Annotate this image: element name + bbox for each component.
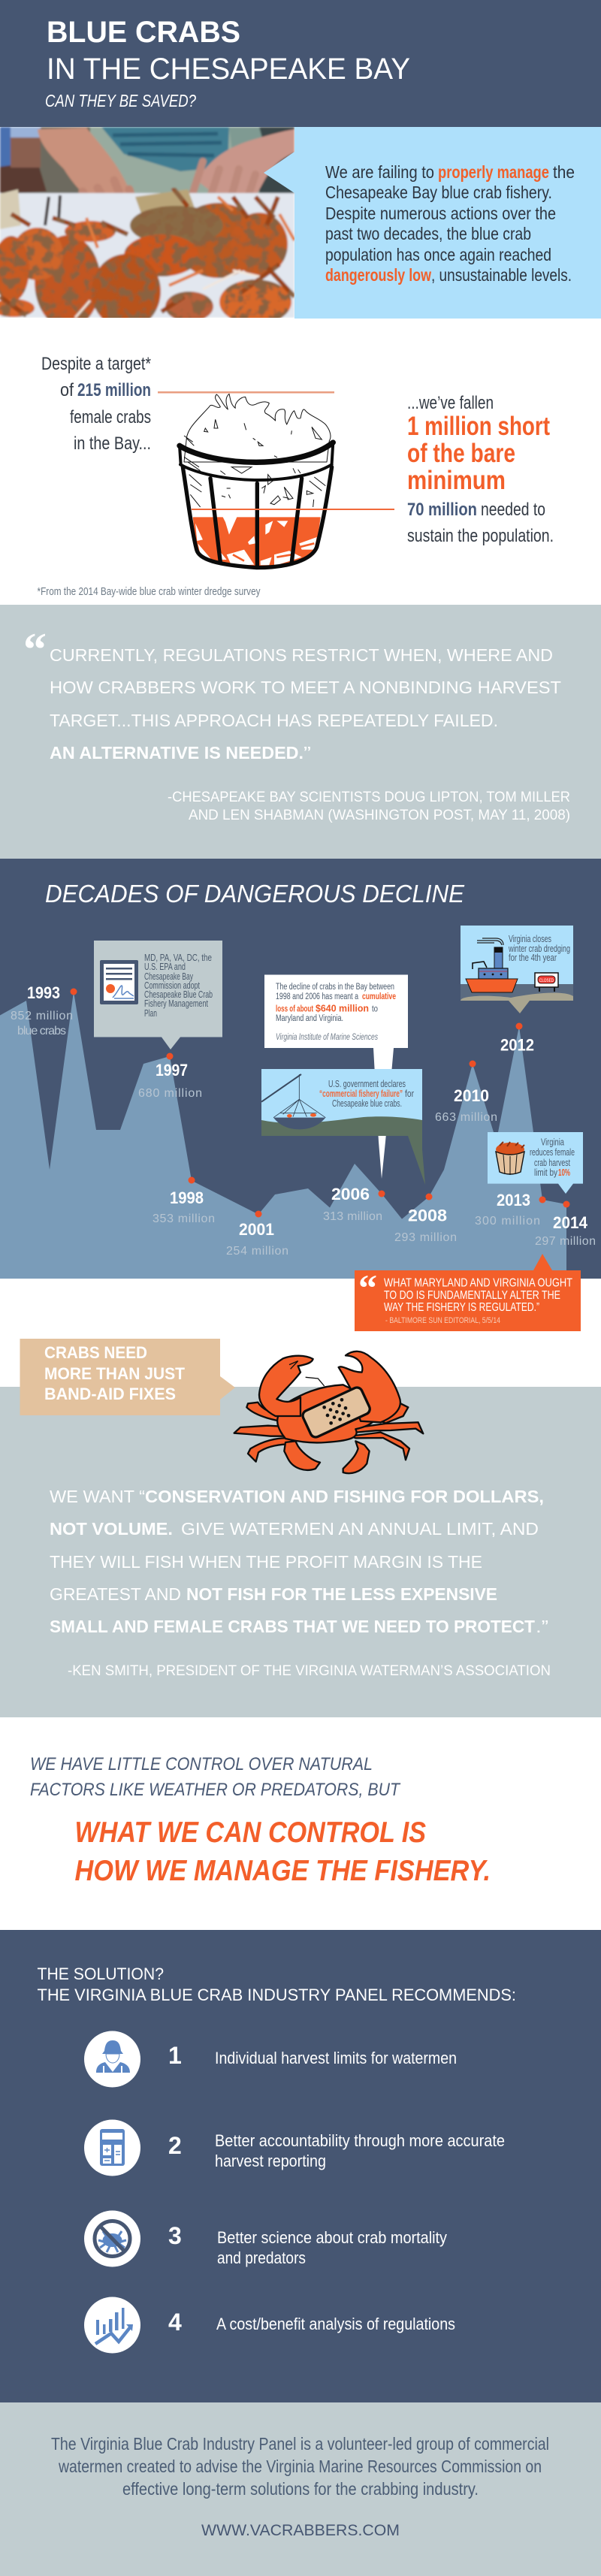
quote: conservation and fishing for dollars: SMALL AND FEMALE CRABS THAT WE NEED TO PROTECT bbox=[50, 1617, 535, 1636]
callout: dredging closed bbox=[461, 926, 573, 1013]
recommendation 1: Individual harvest limits for watermen bbox=[215, 2049, 457, 2067]
text: target of 215 million: female crabs bbox=[70, 407, 151, 427]
callout: cumulative loss bbox=[264, 975, 408, 1179]
band-aid bbox=[301, 1386, 372, 1439]
value labels: 852 million bbox=[11, 1010, 73, 1022]
callout text: for bbox=[405, 1089, 414, 1099]
quote mark: “ bbox=[358, 1267, 377, 1309]
text: shortfall callout: 70 million bbox=[407, 500, 477, 520]
heading: what we can control bbox=[75, 1816, 491, 1887]
quote attribution: AND LEN SHABMAN (WASHINGTON POST, MAY 11, 2008) bbox=[189, 808, 570, 823]
value labels: 680 million bbox=[138, 1087, 202, 1100]
orange fill level bbox=[193, 517, 321, 568]
recommendation 1 bbox=[84, 2031, 457, 2087]
callout: Baltimore Sun quote bbox=[355, 1254, 581, 1331]
recommendation 3 bbox=[84, 2210, 447, 2267]
value labels: 663 million bbox=[435, 1111, 497, 1124]
intro paragraph: dangerously low bbox=[325, 265, 431, 285]
key message: of the bare bbox=[407, 439, 515, 468]
intro paragraph: We are failing to bbox=[325, 162, 434, 182]
quote text: WAY THE FISHERY IS REGULATED.” bbox=[384, 1301, 539, 1314]
value labels: 300 million bbox=[475, 1215, 540, 1228]
intro paragraph: Chesapeake Bay blue crab fishery. bbox=[325, 183, 552, 202]
quote attribution: -CHESAPEAKE BAY SCIENTISTS DOUG LIPTON, TOM MILLER bbox=[168, 790, 570, 805]
year labels bbox=[27, 983, 588, 1239]
value labels bbox=[11, 1010, 596, 1258]
callout: cumulative loss: 1998 and 2006 has meant a bbox=[276, 992, 358, 1001]
callout text: “commercial fishery failure” bbox=[319, 1089, 403, 1099]
icon: signed document bbox=[100, 960, 138, 1004]
year labels: 1998 bbox=[170, 1188, 204, 1207]
callout text: winter crab dredging bbox=[508, 944, 570, 954]
heading: THE VIRGINIA BLUE CRAB INDUSTRY PANEL RECOMMENDS: bbox=[38, 1986, 516, 2004]
quote: conservation and fishing for dollars bbox=[50, 1487, 548, 1636]
value labels: 313 million bbox=[323, 1210, 382, 1223]
website: WWW.VACRABBERS.COM bbox=[201, 2522, 400, 2539]
callout text: MD, PA, VA, DC, the bbox=[144, 953, 212, 963]
quote text bbox=[384, 1277, 572, 1314]
recommendation 1: 1 bbox=[168, 2042, 182, 2069]
quote: conservation and fishing for dollars: WE WANT “ bbox=[50, 1487, 145, 1506]
callout text bbox=[144, 953, 213, 1019]
value labels: 293 million bbox=[394, 1231, 457, 1244]
title: IN THE CHESAPEAKE BAY bbox=[47, 53, 410, 86]
intro paragraph: Despite numerous actions over the bbox=[325, 204, 556, 223]
callout text bbox=[319, 1079, 414, 1109]
callout: cumulative loss: cumulative bbox=[362, 992, 396, 1001]
text: shortfall callout: needed to bbox=[481, 500, 545, 520]
year labels: 1997 bbox=[156, 1061, 188, 1080]
value labels: blue crabs bbox=[17, 1025, 66, 1037]
year labels: 2006 bbox=[331, 1185, 370, 1203]
quote text: AN ALTERNATIVE IS NEEDED. bbox=[50, 743, 304, 763]
callout text: U.S. EPA and bbox=[144, 962, 186, 972]
text: shortfall callout bbox=[407, 393, 554, 546]
data points bbox=[71, 989, 569, 1217]
year labels: 2001 bbox=[239, 1220, 274, 1239]
intro paragraph: , unsustainable levels. bbox=[431, 265, 572, 285]
callout text bbox=[530, 1137, 575, 1178]
year labels: 2008 bbox=[408, 1206, 447, 1225]
quote text: HOW CRABBERS WORK TO MEET A NONBINDING HARVEST bbox=[50, 678, 561, 697]
quote: conservation and fishing for dollars: NOT FISH FOR THE LESS EXPENSIVE bbox=[186, 1584, 497, 1604]
callout text: 10% bbox=[558, 1167, 570, 1178]
crab pile outline bbox=[184, 394, 331, 462]
panel: scientists quote bbox=[0, 605, 601, 859]
text: target of 215 million: of bbox=[60, 380, 74, 400]
quote mark: “ bbox=[23, 624, 47, 675]
icon: waterman bbox=[84, 2031, 140, 2087]
quote attribution: -KEN SMITH, PRESIDENT OF THE VIRGINIA WATERMAN’S ASSOCIATION bbox=[68, 1663, 551, 1679]
callout text: crab harvest bbox=[534, 1158, 570, 1168]
callout text: for the 4th year bbox=[509, 953, 557, 963]
intro paragraph: the bbox=[553, 162, 575, 182]
year labels: 2010 bbox=[454, 1086, 489, 1105]
icon: calculator bbox=[84, 2120, 140, 2176]
banner: band-aid fixes: MORE THAN JUST bbox=[44, 1364, 186, 1383]
title: BLUE CRABS bbox=[47, 16, 240, 49]
recommendation 2: harvest reporting bbox=[215, 2152, 326, 2170]
chart title: DECADES OF DANGEROUS DECLINE bbox=[45, 880, 465, 907]
banner: band-aid fixes: CRABS NEED bbox=[44, 1343, 147, 1362]
heading: what we can control: HOW WE MANAGE THE FISHERY. bbox=[75, 1855, 491, 1887]
icon: chart with arrow bbox=[84, 2297, 140, 2353]
quote source: - BALTIMORE SUN EDITORIAL, 5/5/14 bbox=[385, 1316, 500, 1325]
panel: intro statement bbox=[264, 127, 601, 319]
callout: cumulative loss: The decline of crabs in the Bay between bbox=[276, 983, 394, 992]
quote text bbox=[50, 645, 561, 763]
callout: harvest limit reduced bbox=[488, 1132, 583, 1194]
recommendation 3: Better science about crab mortality bbox=[217, 2228, 447, 2247]
callout text: Fishery Management bbox=[144, 998, 208, 1009]
intro paragraph: properly manage bbox=[438, 162, 549, 182]
panel: footer bbox=[0, 2402, 601, 2576]
year labels: 1993 bbox=[27, 983, 60, 1002]
icon: closed sign bbox=[535, 973, 558, 992]
callout: cumulative loss: Maryland and Virginia. bbox=[276, 1014, 343, 1023]
text: target of 215 million: Despite a target* bbox=[41, 354, 151, 374]
recommendation 3: and predators bbox=[217, 2248, 306, 2267]
year labels: 2014 bbox=[553, 1213, 588, 1232]
intro paragraph: past two decades, the blue crab bbox=[325, 224, 531, 243]
banner: band-aid fixes: BAND-AID FIXES bbox=[44, 1385, 176, 1403]
text: target of 215 million: 215 million bbox=[77, 380, 151, 400]
text: shortfall callout: ...we’ve fallen bbox=[407, 393, 494, 413]
about text bbox=[51, 2434, 549, 2499]
panel: band-aid quote background bbox=[0, 1387, 601, 1717]
text: target of 215 million: in the Bay... bbox=[74, 433, 151, 454]
illustration: crab with band-aid bbox=[234, 1351, 423, 1473]
quote attribution bbox=[168, 790, 570, 823]
quote text: TARGET...THIS APPROACH HAS REPEATEDLY FAILED. bbox=[50, 711, 498, 730]
quote text: CURRENTLY, REGULATIONS RESTRICT WHEN, WHERE AND bbox=[50, 645, 553, 665]
quote: conservation and fishing for dollars: GREATEST AND bbox=[50, 1584, 181, 1604]
callout text bbox=[508, 934, 570, 963]
callout: management plan bbox=[94, 941, 222, 1049]
recommendation 4: 4 bbox=[168, 2309, 182, 2336]
callout: cumulative loss: $640 million bbox=[316, 1002, 369, 1014]
recommendation 2: Better accountability through more accurate bbox=[215, 2131, 505, 2150]
quote text: TO DO IS FUNDAMENTALLY ALTER THE bbox=[384, 1289, 560, 1302]
icon: dredging boat bbox=[466, 938, 518, 992]
callout: cumulative loss: Virginia Institute of Marine Sciences bbox=[276, 1033, 378, 1042]
footnote: *From the 2014 Bay-wide blue crab winter dredge survey bbox=[38, 585, 261, 598]
key message bbox=[407, 412, 550, 495]
icon: boat with dredge bbox=[261, 1074, 325, 1129]
key message: 1 million short bbox=[407, 412, 550, 441]
recommendation 2 bbox=[84, 2120, 505, 2176]
heading: what we can control: WHAT WE CAN CONTROL IS bbox=[75, 1816, 426, 1849]
text: target of 215 million bbox=[41, 354, 151, 454]
key message: minimum bbox=[407, 466, 506, 495]
callout text: limit by bbox=[534, 1167, 558, 1178]
quote: conservation and fishing for dollars: NOT VOLUME. bbox=[50, 1519, 173, 1539]
callout text: Virginia closes bbox=[509, 934, 551, 944]
callout text: reduces female bbox=[530, 1147, 575, 1158]
text: shortfall callout: sustain the population. bbox=[407, 526, 554, 546]
panel: decades of decline chart bbox=[0, 859, 601, 1279]
text: natural factors: FACTORS LIKE WEATHER OR PREDATORS, BUT bbox=[30, 1780, 401, 1800]
icon: basket of crabs bbox=[496, 1142, 524, 1175]
about text: effective long-term solutions for the crabbing industry. bbox=[122, 2479, 479, 2499]
quote: conservation and fishing for dollars: GIVE WATERMEN AN ANNUAL LIMIT, AND bbox=[181, 1519, 539, 1539]
text: natural factors: WE HAVE LITTLE CONTROL OVER NATURAL bbox=[30, 1754, 373, 1774]
heading bbox=[38, 1964, 516, 2004]
subtitle: CAN THEY BE SAVED? bbox=[45, 91, 196, 110]
heading: THE SOLUTION? bbox=[38, 1964, 164, 1983]
intro paragraph: population has once again reached bbox=[325, 245, 551, 264]
callout: fishery failure bbox=[261, 1069, 425, 1185]
recommendation 4: A cost/benefit analysis of regulations bbox=[216, 2315, 455, 2333]
basket frame bbox=[180, 442, 333, 568]
callout text: Chesapeake blue crabs. bbox=[332, 1098, 402, 1109]
callout text: Chesapeake Bay bbox=[144, 971, 194, 982]
callout: cumulative loss: loss of about bbox=[276, 1005, 313, 1014]
callout text: Commission adopt bbox=[144, 980, 200, 991]
text: natural factors bbox=[30, 1754, 401, 1800]
quote: conservation and fishing for dollars: THEY WILL FISH WHEN THE PROFIT MARGIN IS THE bbox=[50, 1552, 482, 1572]
marker line: 70 million level bbox=[192, 509, 394, 510]
intro paragraph bbox=[325, 162, 575, 285]
recommendation 4 bbox=[84, 2297, 455, 2353]
illustration: bushel basket of crabs, partly filled bbox=[180, 394, 333, 568]
quote: conservation and fishing for dollars: CONSERVATION AND FISHING FOR DOLLARS, bbox=[145, 1487, 544, 1506]
year labels: 2013 bbox=[497, 1191, 530, 1209]
callout text: Chesapeake Blue Crab bbox=[144, 989, 213, 1000]
value labels: 254 million bbox=[226, 1245, 288, 1258]
callout text: Plan bbox=[144, 1008, 157, 1019]
panel: header bbox=[0, 0, 601, 127]
callout text: Virginia bbox=[541, 1137, 564, 1148]
icon: closed sign: CLOSED bbox=[539, 979, 554, 983]
value labels: 297 million bbox=[535, 1235, 596, 1248]
banner: band-aid fixes bbox=[20, 1339, 235, 1415]
marker line: 215 million level bbox=[158, 391, 334, 394]
value labels: 353 million bbox=[153, 1213, 215, 1225]
recommendation 3: 3 bbox=[168, 2222, 182, 2249]
photo: hands picking steamed crabs bbox=[0, 127, 294, 329]
callout: cumulative loss: to bbox=[372, 1005, 378, 1014]
panel: the solution bbox=[0, 1930, 601, 2402]
icon: crossed-out crab bbox=[84, 2210, 140, 2267]
area chart bbox=[0, 992, 566, 1279]
title bbox=[47, 16, 410, 86]
recommendation 2: 2 bbox=[168, 2132, 182, 2159]
year labels: 2012 bbox=[500, 1035, 534, 1055]
quote: conservation and fishing for dollars: .” bbox=[536, 1617, 548, 1636]
callout text: U.S. government declares bbox=[328, 1079, 406, 1089]
quote text: ” bbox=[304, 743, 311, 763]
